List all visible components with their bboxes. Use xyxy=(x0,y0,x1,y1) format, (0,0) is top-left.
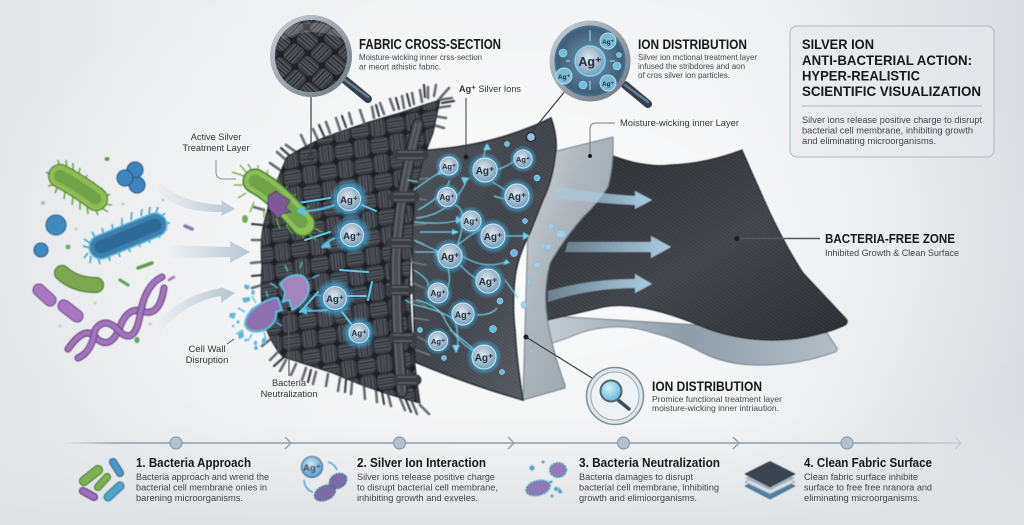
label: active silver treatment layer: Active Silver xyxy=(191,132,241,142)
text: step 4: Clean fabric surface inhibite xyxy=(804,472,918,482)
fabric bacteria cyan pointers xyxy=(300,205,335,311)
label: cell wall disruption: Disruption xyxy=(186,355,228,366)
arrow: approach top xyxy=(155,180,235,216)
ion xyxy=(499,178,535,214)
thick right-edge strands xyxy=(392,124,423,392)
small debris particles xyxy=(41,157,248,343)
ion: Ag⁺ xyxy=(441,252,459,263)
blue rod bacterium xyxy=(83,207,170,264)
cyan arrows on fabric xyxy=(298,198,376,325)
step 1 xyxy=(83,456,269,503)
title: ANTI-BACTERIAL ACTION: xyxy=(802,52,972,68)
illustration: layered fabric xyxy=(251,85,847,414)
text: step 2: 2. Silver Ion Interaction xyxy=(357,456,486,470)
heading: fabric cross-section: FABRIC CROSS-SECTION xyxy=(359,37,501,53)
ion xyxy=(342,316,376,350)
label: bacteria-free zone: Inhibited Growth & Clean Surface xyxy=(825,248,959,258)
bacteria on fabric xyxy=(229,164,335,350)
small blue coccus xyxy=(34,243,48,257)
ion: Ag⁺ xyxy=(455,310,472,320)
label: bacteria neutralization xyxy=(261,378,317,399)
title xyxy=(802,36,981,99)
text: step 2: to disrupt bacterial cell membrane, xyxy=(357,482,498,492)
label: cell wall disruption xyxy=(186,344,228,366)
arrow: approach middle xyxy=(167,241,250,263)
icon: ion distribution magnifier: Ag⁺ xyxy=(558,74,571,81)
ion xyxy=(467,152,503,188)
cyan arrowheads xyxy=(436,143,530,353)
text: step 4 xyxy=(804,456,932,503)
ion xyxy=(447,298,479,330)
purple bacterium fragment upper xyxy=(270,262,321,311)
ion: Ag⁺ xyxy=(484,232,502,243)
ion: Ag⁺ xyxy=(464,217,478,226)
green peanut bacterium xyxy=(62,273,96,285)
label: active silver treatment layer: Treatment Layer xyxy=(182,143,250,153)
ion xyxy=(424,327,452,355)
text: step 1: 1. Bacteria Approach xyxy=(136,456,251,470)
ion: Ag⁺ xyxy=(479,277,497,288)
under layer: grey backing sheet xyxy=(535,315,837,365)
title: SCIENTIFIC VISUALIZATION xyxy=(802,83,981,99)
title: HYPER-REALISTIC xyxy=(802,68,920,84)
label: bacteria neutralization: Bacteria xyxy=(272,378,307,388)
text: step 3 xyxy=(579,456,720,503)
label: bacteria-free zone: BACTERIA-FREE ZONE xyxy=(825,231,955,246)
heading: fabric cross-section: ar meort athistic fabric. xyxy=(359,62,441,72)
ion: Ag⁺ xyxy=(440,193,454,202)
arrow: approach bottom xyxy=(155,287,235,332)
heading: ion distribution: of cros silver ion particles. xyxy=(638,71,730,80)
icon: ag ion and bacteria: Ag⁺ xyxy=(303,463,321,474)
blue coccus cluster xyxy=(117,162,145,193)
ion xyxy=(315,278,355,318)
description xyxy=(802,115,983,146)
text: step 3: Bacteria damages to disrupt xyxy=(579,472,694,482)
purple bacterium fragment lower xyxy=(236,291,282,341)
label: bacteria-free zone xyxy=(825,231,959,258)
green rod bacterium xyxy=(46,160,112,215)
panel: title card xyxy=(790,26,994,157)
ion xyxy=(456,206,486,236)
step 3 xyxy=(525,456,720,503)
purple spirochete xyxy=(68,277,164,358)
heading: ion distribution xyxy=(638,37,757,80)
text: step 3: 3. Bacteria Neutralization xyxy=(579,456,720,470)
heading: ion distribution: infused the stribdores and aon xyxy=(638,62,745,71)
ion xyxy=(475,218,511,254)
ion xyxy=(432,238,468,274)
text: step 4: eliminating microorganisms. xyxy=(804,493,920,503)
ion: Ag⁺ xyxy=(476,166,494,177)
ion xyxy=(466,339,502,375)
green bacterium under attack xyxy=(232,164,322,240)
ion: Ag⁺ xyxy=(475,353,493,364)
description: Silver ions release positive charge to disrupt xyxy=(802,115,983,125)
text: ion distribution lower: Promice functional treatment layer xyxy=(652,395,782,404)
ion xyxy=(509,145,537,173)
ion xyxy=(423,278,453,308)
ion xyxy=(433,183,461,211)
text: step 2 xyxy=(357,456,498,503)
ion: Ag⁺ xyxy=(442,162,456,171)
icon: ion distribution magnifier xyxy=(552,23,648,104)
icon: magnifier badge xyxy=(586,368,644,424)
icon: ion distribution magnifier: Ag⁺ xyxy=(578,55,602,69)
water droplets xyxy=(521,222,566,352)
panel: silver ion treatment layer xyxy=(410,118,556,400)
text: ion distribution lower: moisture-wicking inner intriaution. xyxy=(652,404,779,413)
ion xyxy=(329,179,369,219)
text: step 4: 4. Clean Fabric Surface xyxy=(804,456,932,470)
blue ion droplets xyxy=(418,142,540,374)
text: step 3: bacterial cell membrane, inhibiting xyxy=(579,482,719,492)
text: step 2: inhibiting growth and exveles. xyxy=(357,493,478,503)
heading: ion distribution: Silver ion mctional treatment layer xyxy=(638,53,757,62)
icon: ion distribution magnifier: Ag⁺ xyxy=(602,39,615,46)
purple rod one xyxy=(39,290,50,300)
silver ions on treatment layer xyxy=(423,145,537,375)
ion: Ag⁺ xyxy=(326,294,344,305)
icon: ag ion and bacteria xyxy=(302,456,349,504)
text: ion distribution lower xyxy=(652,379,782,413)
heading: fabric cross-section xyxy=(359,37,501,72)
purple rod two xyxy=(64,306,77,316)
label: silver ions: Ag⁺ Silver Ions xyxy=(459,84,521,95)
text: step 4: surface to free free nranora and xyxy=(804,482,932,492)
label: bacteria neutralization: Neutralization xyxy=(261,389,317,399)
cyan ion trails xyxy=(405,148,524,352)
heading: fabric cross-section: Moisture-wicking inner crss-section xyxy=(359,53,482,62)
heading: ion distribution: ION DISTRIBUTION xyxy=(638,37,747,52)
ion xyxy=(470,263,506,299)
title: SILVER ION xyxy=(802,36,874,52)
ion: Ag⁺ xyxy=(431,337,445,346)
text: ion distribution lower: ION DISTRIBUTION xyxy=(652,379,762,394)
arrow: airflow middle xyxy=(565,236,671,258)
icon: ion distribution magnifier: Ag⁺ xyxy=(602,81,615,88)
text: step 1: Bacteria approach and wrend the xyxy=(136,472,269,482)
text: step 3: growth and elimioorganisms. xyxy=(579,493,697,503)
ion xyxy=(435,152,463,180)
step 2 xyxy=(302,456,498,504)
description: and eliminating microorganisms. xyxy=(802,136,936,146)
silver ions on woven fabric xyxy=(298,179,376,350)
cell wall debris xyxy=(229,284,266,350)
approach arrows xyxy=(155,180,250,332)
ion: Ag⁺ xyxy=(343,231,361,242)
timeline xyxy=(62,437,962,449)
arrow: airflow top xyxy=(553,186,652,209)
ion: Ag⁺ xyxy=(431,289,445,298)
panel: moisture-wicking inner layer xyxy=(521,137,613,400)
ion: Ag⁺ xyxy=(508,192,526,203)
panel: woven fabric xyxy=(261,100,440,403)
text: step 1: barening microorganisms. xyxy=(136,493,243,503)
text: step 1: bacterial cell membrane onies in xyxy=(136,482,267,492)
ion xyxy=(332,215,372,255)
icon: burst bacteria xyxy=(525,460,566,498)
icon: fabric stack xyxy=(745,462,795,499)
ion: Ag⁺ xyxy=(352,329,366,338)
icon: bacteria group xyxy=(83,462,120,497)
label: cell wall disruption: Cell Wall xyxy=(188,344,226,355)
woven fringe fibres xyxy=(251,85,454,414)
ion: Ag⁺ xyxy=(516,155,530,164)
text: step 1 xyxy=(136,456,269,503)
arrow: airflow bottom xyxy=(548,274,652,302)
label: active silver treatment layer xyxy=(182,132,250,153)
step 4 xyxy=(745,456,932,503)
text: step 2: Silver ions release positive charge xyxy=(357,472,495,482)
icon: fabric magnifier xyxy=(270,15,372,103)
panel: bacteria-free dark fabric xyxy=(535,150,847,340)
left bacteria group xyxy=(34,157,248,358)
ion: Ag⁺ xyxy=(340,195,358,206)
blue coccus xyxy=(46,215,66,235)
description: bacterial cell membrane, inhibiting growth xyxy=(802,126,973,136)
label: moisture-wicking inner layer: Moisture-wicking inner Layer xyxy=(620,118,740,129)
leader lines and dots xyxy=(216,90,820,378)
